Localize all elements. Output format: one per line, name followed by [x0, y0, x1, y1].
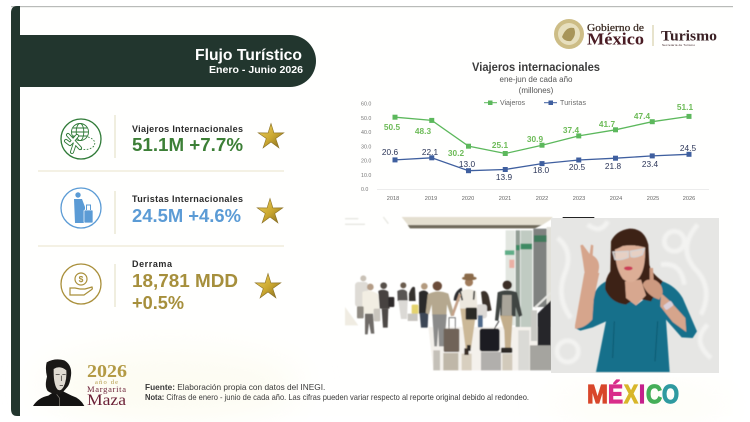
x axis: 2021: [499, 196, 511, 202]
wristband: [663, 300, 674, 310]
header band: [11, 35, 316, 87]
logo: 2026 año de Margarita Maza: [33, 359, 127, 409]
photo: travellers in airport: [340, 217, 553, 370]
data labels: turistas: 20.5: [569, 162, 585, 172]
logo: Gobierno de México: [554, 19, 717, 49]
suitcase black: [480, 321, 500, 351]
data labels: viajeros: 51.1: [677, 102, 693, 112]
data labels: viajeros: 47.4: [634, 111, 650, 121]
logo: México brand: I: [639, 379, 645, 409]
label: turistas: Turistas Internacionales: [132, 194, 243, 204]
woman and child behind: [476, 291, 492, 327]
chart subtitle: ene-jun de cada año: [500, 75, 573, 84]
background crowd: [355, 275, 428, 334]
lips: [624, 266, 633, 270]
icon: coin over hand: [61, 264, 101, 304]
legend: [484, 100, 586, 107]
legend: Viajeros: [500, 100, 526, 107]
value: +0.5%: +0.5%: [132, 293, 184, 313]
data labels: viajeros: 30.2: [448, 148, 464, 158]
icon: star: [257, 198, 283, 223]
y axis: [361, 102, 371, 193]
chart: viajeros internacionales: [361, 60, 709, 202]
text: Gobierno de: Gobierno de: [587, 22, 644, 34]
man in dark vest: [495, 280, 522, 353]
icon: globe and airplane: [61, 119, 101, 159]
logo: México brand: X: [624, 379, 639, 409]
left vertical bar: [11, 6, 20, 416]
man with hat: [452, 274, 478, 355]
logo: México brand: M: [587, 379, 608, 409]
x axis: 2020: [462, 196, 474, 202]
series: turistas: [392, 152, 692, 173]
escalator rail: [531, 310, 537, 341]
data labels: viajeros: 37.4: [563, 125, 579, 135]
y axis: 0.0: [361, 187, 368, 193]
icon: star: [258, 124, 284, 148]
source note: [145, 382, 529, 402]
hair: [605, 229, 663, 305]
y axis: 40.0: [361, 130, 371, 136]
panel: turistas internacionales: [61, 188, 283, 234]
data labels: viajeros: 41.7: [599, 119, 615, 129]
data labels: turistas: 18.0: [533, 165, 549, 175]
x axis: 2018: [387, 196, 399, 202]
data labels: viajeros: 48.3: [415, 126, 431, 136]
label: viajeros: Viajeros Internacionales: [132, 124, 243, 134]
text: México: México: [587, 30, 644, 48]
data labels: turistas: 23.4: [642, 159, 658, 169]
video inset: sign language interpreter: [551, 217, 719, 373]
heading: Flujo Turístico: Flujo Turístico: [195, 47, 302, 64]
text: 2026: 2026: [87, 361, 127, 381]
ceiling: [402, 217, 552, 225]
subheading: period: Enero - Junio 2026: [209, 64, 303, 76]
man in beige jacket: [426, 281, 454, 346]
series: viajeros: [392, 114, 692, 156]
data labels: viajeros: 30.9: [527, 134, 543, 144]
logo: México brand: [587, 379, 679, 409]
text: Secretaría de Turismo: Secretaría de Turismo: [662, 43, 695, 47]
y axis: 10.0: [361, 173, 371, 179]
icon: coin over hand: $: [79, 274, 84, 284]
x axis: 2019: [425, 196, 437, 202]
data labels: turistas: [382, 143, 696, 182]
label: derrama: Derrama: [132, 259, 173, 269]
data labels: turistas: 22.1: [422, 147, 438, 157]
data labels: turistas: 13.9: [496, 172, 512, 182]
interpreter figure: [575, 229, 697, 372]
data labels: viajeros: 25.1: [492, 140, 508, 150]
left arm and hand: [575, 273, 599, 329]
x axis: [387, 196, 695, 202]
source note: Fuente: Elaboración propia con datos del INEGI.: [145, 382, 325, 392]
right forearm and hand: [660, 293, 686, 332]
legend: Turistas: [560, 100, 586, 107]
patterned wall: [557, 221, 711, 362]
source note: Nota: Cifras de enero - junio de cada año. Las cifras pueden variar respecto al reporte original debido al redondeo.: [145, 392, 529, 402]
torso and sleeves: [575, 281, 697, 372]
logo: México brand: É: [608, 379, 623, 409]
data labels: turistas: 13.0: [459, 159, 475, 169]
far-left ceiling and floor haze: [345, 217, 388, 224]
panel: derrama: [61, 259, 281, 313]
face: [615, 245, 645, 282]
data labels: turistas: 21.8: [605, 161, 621, 171]
text: Turismo: Turismo: [661, 28, 717, 44]
chart unit: (millones): [519, 86, 554, 95]
y axis: 30.0: [361, 144, 371, 150]
y axis: 50.0: [361, 116, 371, 122]
data labels: turistas: 20.6: [382, 147, 398, 157]
portrait: Margarita Maza: [33, 359, 84, 406]
icon: star: [255, 274, 281, 298]
data labels: viajeros: 50.5: [384, 122, 400, 132]
columns: [506, 230, 515, 325]
data labels: turistas: 24.5: [680, 143, 696, 153]
chart title: Viajeros internacionales: [472, 60, 600, 74]
icon: tourist with suitcase: [61, 188, 101, 228]
x axis: 2026: [683, 196, 695, 202]
neck and neckline: [625, 280, 646, 305]
x axis: 2023: [573, 196, 585, 202]
value: 24.5M +4.6%: 24.5M +4.6%: [132, 206, 241, 226]
suitcase grey: [444, 318, 459, 352]
y axis: 20.0: [361, 159, 371, 165]
value: 18,781 MDD: 18,781 MDD: [132, 271, 238, 291]
x axis: 2025: [647, 196, 659, 202]
logo: México brand: O: [662, 379, 679, 409]
logo: México brand: C: [646, 379, 662, 409]
y axis: 60.0: [361, 102, 371, 108]
floor: [428, 327, 552, 370]
icon: national seal: [554, 19, 584, 49]
value: 51.1M +7.7%: 51.1M +7.7%: [132, 135, 243, 155]
x axis: 2022: [536, 196, 548, 202]
text: Margarita: Margarita: [87, 384, 126, 394]
data labels: viajeros: [384, 102, 693, 158]
glasses: [613, 249, 644, 260]
text: Maza: Maza: [87, 392, 126, 409]
panel: viajeros internacionales: [61, 115, 284, 159]
x axis: 2024: [610, 196, 622, 202]
text: año de: año de: [95, 379, 118, 386]
